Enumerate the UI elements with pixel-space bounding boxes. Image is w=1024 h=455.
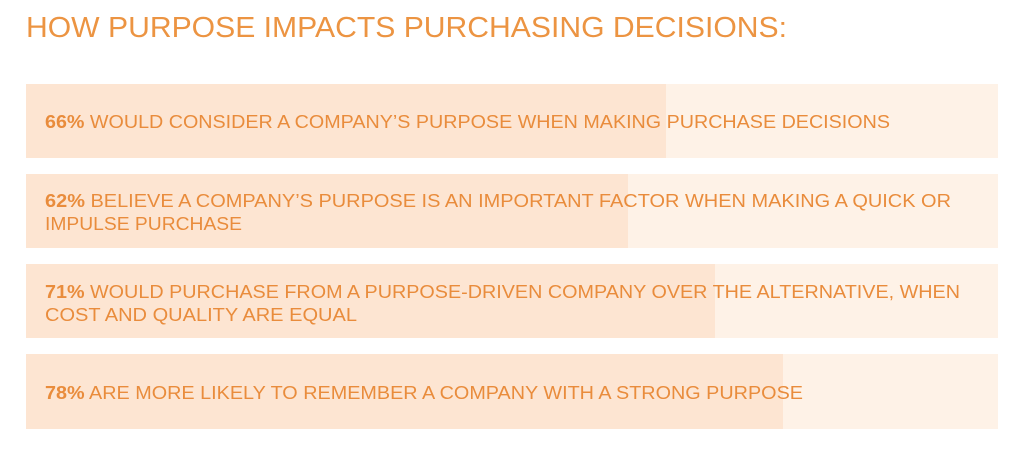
title: HOW PURPOSE IMPACTS PURCHASING DECISIONS: [26, 12, 787, 44]
panel: stat 78%: 78% ARE MORE LIKELY TO REMEMBER A COMPANY WITH A STRONG PURPOSE [45, 383, 803, 403]
panel: stat 66%: 66% WOULD CONSIDER A COMPANY’S PURPOSE WHEN MAKING PURCHASE DECISIONS [45, 112, 890, 132]
panel: stat 66% [26, 84, 998, 158]
panel: stat 71%: 71% WOULD PURCHASE FROM A PURPOSE-DRIVEN COMPANY OVER THE ALTERNATIVE, WHEN [45, 282, 960, 302]
panel: stat 71%: COST AND QUALITY ARE EQUAL [45, 305, 357, 325]
panel: stat 62%: IMPULSE PURCHASE [45, 214, 242, 234]
panel: stat 62% [26, 174, 998, 248]
panel: stat 62%: 62% BELIEVE A COMPANY’S PURPOSE IS AN IMPORTANT FACTOR WHEN MAKING A QUICK OR [45, 191, 951, 211]
panel: stat 71% [26, 264, 998, 338]
panel: stat 78% [26, 354, 998, 429]
